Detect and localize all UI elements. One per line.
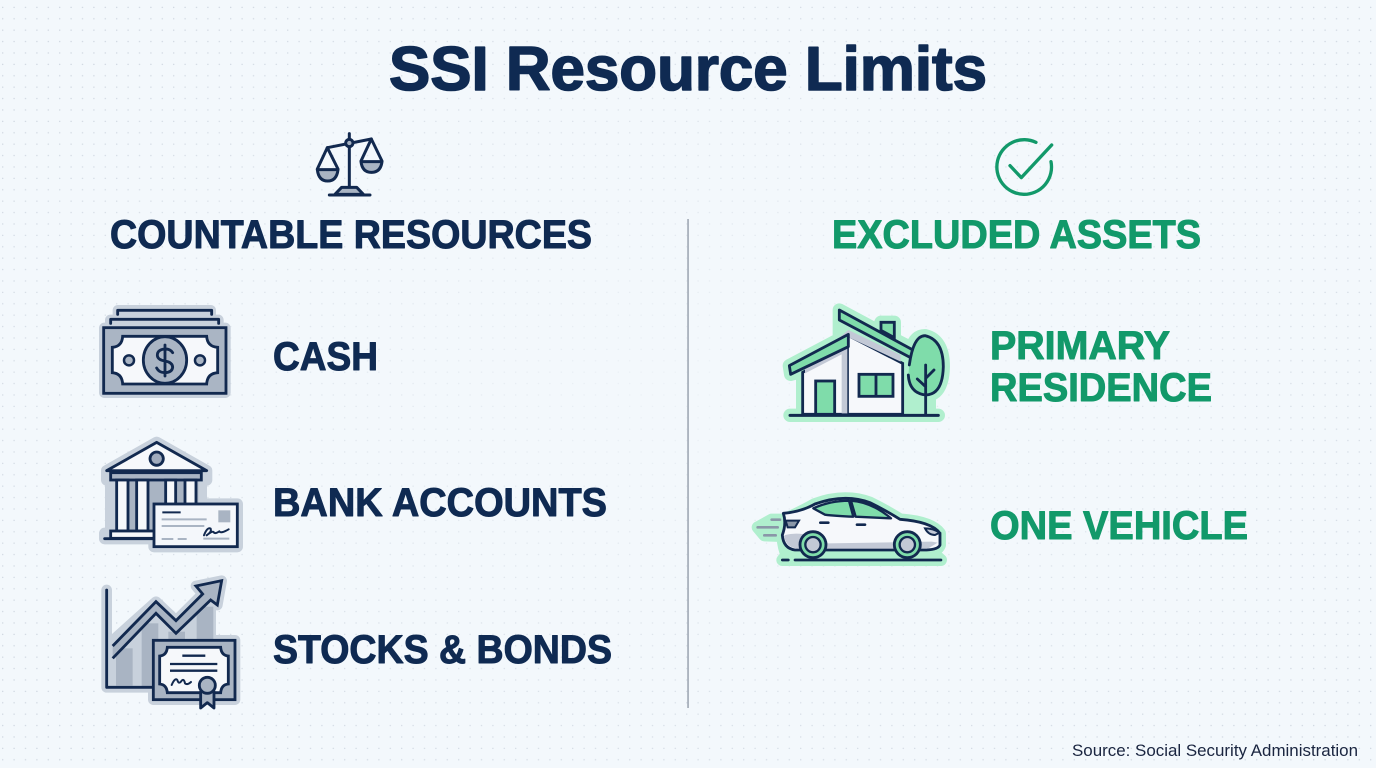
panel: countable resources list [99, 305, 612, 708]
label: primary residence: RESIDENCE [990, 366, 1212, 410]
icon: car [758, 498, 941, 560]
icon: cash [99, 305, 231, 398]
title: SSI Resource Limits [389, 35, 987, 104]
icon: check circle [997, 140, 1052, 194]
divider [687, 219, 689, 708]
label: one vehicle: ONE VEHICLE [990, 504, 1248, 548]
heading: excluded assets: EXCLUDED ASSETS [832, 213, 1201, 257]
icon: stocks and bonds [107, 581, 235, 708]
label: bank accounts: BANK ACCOUNTS [273, 481, 607, 525]
icon: house [789, 310, 943, 415]
icon: bank and check [105, 442, 237, 547]
source note: Source: Social Security Administration [1072, 741, 1358, 760]
label: cash: CASH [273, 335, 378, 379]
label: stocks and bonds: STOCKS & BONDS [273, 628, 612, 672]
label: primary residence [990, 324, 1212, 410]
panel: excluded assets list [758, 310, 1248, 560]
heading: countable resources: COUNTABLE RESOURCES [110, 213, 592, 257]
icon: balance scale [317, 134, 382, 195]
label: primary residence: PRIMARY [990, 324, 1170, 368]
